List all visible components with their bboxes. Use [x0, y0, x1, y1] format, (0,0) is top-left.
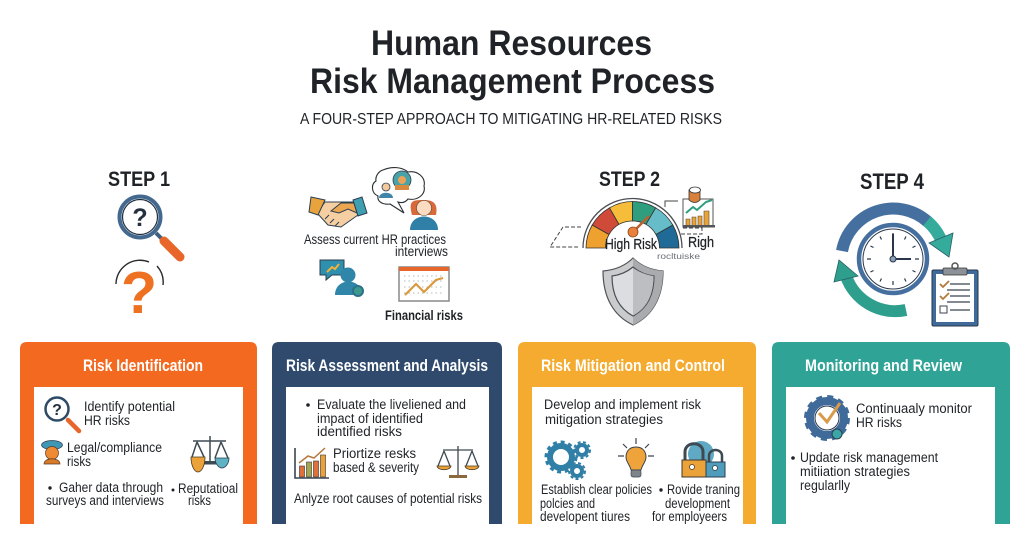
icon: gear with check — [806, 397, 848, 439]
text: prioritize risks — [333, 446, 419, 475]
icon: magnifying glass with question mark — [120, 196, 180, 257]
step 1 label: STEP 1 — [108, 168, 170, 191]
text: establish clear policies: Establish clear policies — [541, 482, 652, 497]
step 2 label: STEP 2 — [599, 168, 660, 191]
heading: risk assessment and analysis: Risk Assessment and Analysis — [286, 356, 488, 375]
text: update risk management: Update risk management — [800, 450, 938, 465]
text: financial risks: Financial risks — [385, 307, 463, 323]
text: provide training: Rovide traning — [667, 482, 740, 497]
text: prioritize risks: based & severity — [333, 460, 419, 475]
heading: risk mitigation and control: Risk Mitigation and Control — [541, 356, 725, 375]
title: Human Resources — [371, 24, 652, 63]
text: assess current HR practices: interviews — [395, 244, 448, 259]
text: assess current HR practices — [304, 232, 448, 259]
icon: bar chart with arrow — [295, 448, 329, 478]
text: update risk management — [791, 450, 938, 493]
icon: clock with cycle arrows — [834, 209, 953, 311]
text: develop and implement — [544, 397, 701, 427]
subtitle: A FOUR-STEP APPROACH TO MITIGATING HR-RELATED RISKS — [300, 111, 722, 128]
text: provide training: for employeers — [652, 509, 727, 524]
text: legal compliance risks — [67, 440, 162, 469]
text: continually monitor — [856, 401, 972, 430]
dashed connector left — [550, 227, 581, 247]
heading: risk identification: Risk Identification — [83, 356, 203, 375]
text: evaluate likelihood and impact — [306, 397, 466, 439]
text: develop and implement: mitigation strategies — [545, 412, 663, 427]
title — [310, 24, 715, 101]
text: establish clear policies: developent tiures — [540, 509, 630, 524]
icon: small magnifier: ? — [52, 402, 62, 419]
panel: risk assessment and analysis — [272, 342, 502, 524]
text: identify potential HR risks — [84, 399, 175, 428]
gauge label: high risk: High Risk — [605, 237, 658, 253]
icon: person — [410, 200, 438, 230]
icon: speech bubble with people — [372, 168, 424, 213]
text: establish clear policies: polcies and — [540, 496, 595, 511]
text: legal compliance risks: Legal/compliance — [67, 440, 162, 455]
text: develop and implement: Develop and implement risk — [544, 397, 701, 412]
text: update risk management: mitiiation strategies — [800, 464, 910, 479]
text: evaluate likelihood and impact: identified risks — [317, 424, 402, 439]
icon: growth chart with cup — [665, 187, 715, 234]
text: assess current HR practices: Assess current HR practices — [304, 232, 446, 247]
panel: risk identification — [20, 342, 257, 524]
text: evaluate likelihood and impact: impact of identified — [317, 411, 423, 426]
gauge label: righ: Righ — [688, 234, 714, 251]
icon: clipboard checklist — [932, 263, 978, 326]
text: legal compliance risks: risks — [67, 454, 91, 469]
icon: padlocks — [682, 441, 725, 477]
icon: financial chart — [399, 267, 449, 301]
text: gather data: surveys and interviews — [46, 493, 164, 508]
icon: risk gauge — [583, 198, 682, 248]
text: analyze root causes: Anlyze root causes of potential risks — [294, 491, 482, 506]
text: evaluate likelihood and impact: Evaluate the liveliened and — [317, 397, 466, 412]
step 4 label: STEP 4 — [860, 169, 925, 194]
icon: shield — [603, 258, 663, 325]
text: identify potential HR risks: HR risks — [84, 413, 130, 428]
text: identify potential HR risks: Identify potential — [84, 399, 175, 414]
icon: scales — [191, 436, 229, 472]
icon: legal person — [42, 440, 62, 464]
text: continually monitor: HR risks — [856, 415, 902, 430]
gauge sublabel: rocltuiske — [657, 252, 701, 261]
heading: monitoring and review: Monitoring and Review — [805, 356, 963, 375]
icon: lightbulb — [618, 438, 654, 477]
text: gather data: Gaher data through — [59, 480, 163, 495]
icon: person with chart bubble — [320, 260, 363, 296]
text: prioritize risks: Priortize resks — [333, 446, 416, 461]
text: reputational risks: risks — [188, 493, 211, 508]
panel: monitoring and review — [772, 342, 1010, 524]
text: gather data — [46, 480, 164, 508]
text: continually monitor: Continuaaly monitor — [856, 401, 972, 416]
text: provide training: development — [665, 496, 730, 511]
text: establish clear policies — [540, 482, 652, 524]
text: update risk management: regularlly — [800, 478, 850, 493]
icon: small magnifier — [46, 398, 79, 431]
icon: orange question mark in arc: ? — [121, 260, 157, 326]
icon: gears — [546, 442, 590, 479]
text: reputational risks — [172, 481, 238, 508]
title: Risk Management Process — [310, 62, 715, 101]
text: reputational risks: Reputatioal — [178, 481, 238, 496]
icon: balance scales — [437, 446, 479, 478]
icon: magnifying glass with question mark: ? — [132, 204, 148, 232]
text: provide training — [652, 482, 740, 524]
icon: handshake — [309, 197, 367, 227]
panel: risk mitigation and control — [518, 342, 756, 524]
